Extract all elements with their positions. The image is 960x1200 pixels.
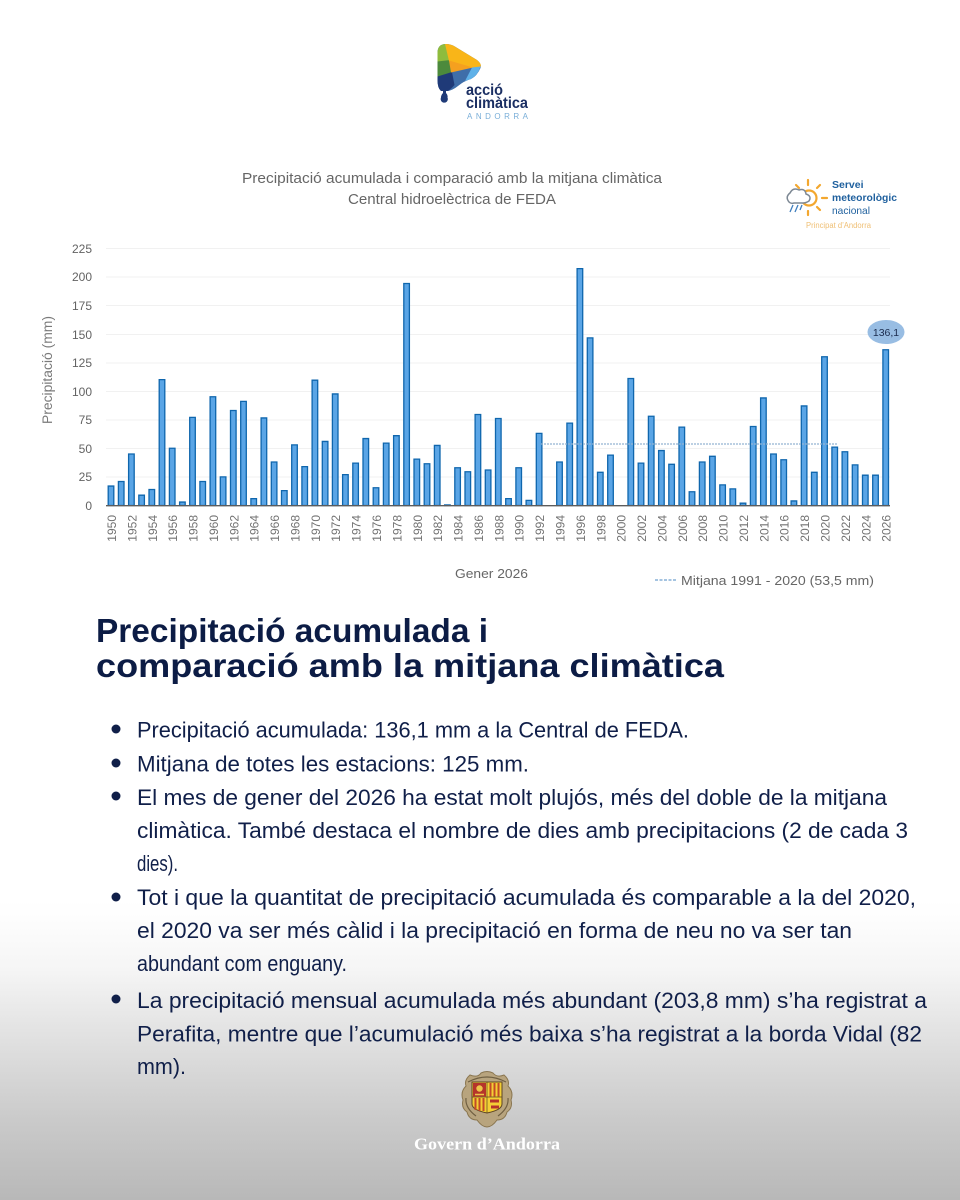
x axis year labels: 2026 (880, 515, 894, 542)
x axis year labels: 1970 (309, 515, 323, 542)
heading (96, 612, 725, 684)
y axis labels (72, 242, 92, 513)
x axis year labels: 1980 (411, 515, 425, 542)
bullet: rainy January: El mes de gener del 2026 ha estat molt plujós, més del doble de la mitjana (137, 785, 887, 810)
y axis labels: 175 (72, 299, 92, 313)
logo: Servei meteorològic nacional: meteorològic (832, 192, 897, 204)
y axis labels: 50 (79, 442, 92, 456)
x axis year labels: 1990 (513, 515, 527, 542)
logo: Servei meteorològic nacional: Principat d’Andorra (806, 221, 872, 230)
x axis year labels: 1962 (227, 515, 241, 542)
x axis year labels: 1978 (390, 515, 404, 542)
bullet: rainy January: dies). (137, 851, 178, 876)
bullet: comparison with 2020: Tot i que la quantitat de precipitació acumulada és comparable a la del 2020, (137, 885, 916, 910)
x axis year labels: 1986 (472, 515, 486, 542)
x axis year labels: 2000 (615, 515, 629, 542)
y axis labels: 25 (79, 470, 92, 484)
x axis year labels: 1966 (268, 515, 282, 542)
x axis year labels: 1988 (492, 515, 506, 542)
chart title (242, 171, 663, 208)
x axis year labels: 1950 (105, 515, 119, 542)
y axis labels: 125 (72, 356, 92, 370)
heading: comparació amb la mitjana climàtica (96, 647, 725, 684)
x axis year labels: 1996 (574, 515, 588, 542)
logo: Servei meteorològic nacional: nacional (832, 205, 870, 217)
Govern d'Andorra wordmark: Govern d’Andorra (414, 1134, 561, 1154)
x axis year labels: 1958 (186, 515, 200, 542)
x axis year labels: 1982 (431, 515, 445, 542)
x axis year labels: 1952 (125, 515, 139, 542)
x axis year labels: 2006 (676, 515, 690, 542)
bullet list (112, 718, 927, 1079)
y axis title: Precipitació (mm) (40, 316, 55, 424)
x axis year labels: 1968 (288, 515, 302, 542)
y axis labels: 75 (79, 413, 92, 427)
callout: 2026 value (868, 320, 904, 344)
legend: Mitjana 1991 - 2020 (53,5 mm) (681, 573, 874, 588)
x axis year labels: 1956 (166, 515, 180, 542)
y axis labels: 225 (72, 242, 92, 256)
x axis year labels: 2018 (798, 515, 812, 542)
x axis year labels: 1998 (594, 515, 608, 542)
bullet: comparison with 2020: abundant com enguany. (137, 951, 347, 976)
callout: 2026 value: 136,1 (873, 327, 899, 339)
x axis year labels: 1960 (207, 515, 221, 542)
x axis year labels: 2002 (635, 515, 649, 542)
x axis year labels: 2016 (778, 515, 792, 542)
bullet: highest and lowest totals: Perafita, mentre que l’acumulació més baixa s’ha registrat a la borda Vidal (82 (137, 1022, 922, 1046)
bullet: comparison with 2020 (112, 885, 916, 976)
logo: Servei meteorològic nacional (787, 179, 897, 230)
x axis year labels: 2004 (655, 515, 669, 542)
x axis year labels: 1964 (248, 515, 262, 542)
x axis year labels: 2022 (839, 515, 853, 542)
x axis year labels: 1984 (452, 515, 466, 542)
bar chart: precipitation 1950-2026 (40, 242, 904, 588)
logo: Acció Climàtica Andorra (438, 44, 529, 121)
bars (108, 269, 888, 506)
x axis line (106, 505, 890, 507)
x axis year labels: 2020 (818, 515, 832, 542)
x axis year labels: 1994 (554, 515, 568, 542)
chart title: Central hidroelèctrica de FEDA (348, 192, 556, 208)
y axis labels: 0 (85, 499, 92, 513)
climate mean line (541, 443, 838, 445)
x axis year labels: 1974 (350, 515, 364, 542)
bullet: highest and lowest totals (112, 988, 927, 1079)
x axis year labels: 2024 (859, 515, 873, 542)
logo: Acció Climàtica Andorra: climàtica (466, 95, 528, 112)
x axis year labels: 2014 (757, 515, 771, 542)
bullet: accumulated precipitation: Precipitació acumulada: 136,1 mm a la Central de FEDA. (137, 718, 689, 742)
x axis year labels: 1976 (370, 515, 384, 542)
x axis year labels: 1972 (329, 515, 343, 542)
x axis year labels: 1954 (146, 515, 160, 542)
bullet: highest and lowest totals: La precipitació mensual acumulada més abundant (203,8 mm) s’ha registrat a (137, 988, 927, 1013)
bullet: mean of all stations: Mitjana de totes les estacions: 125 mm. (137, 752, 529, 776)
chart title: Precipitació acumulada i comparació amb la mitjana climàtica (242, 171, 663, 187)
y axis labels: 100 (72, 385, 92, 399)
x axis year labels: 1992 (533, 515, 547, 542)
heading: Precipitació acumulada i (96, 612, 488, 649)
y axis labels: 150 (72, 328, 92, 342)
logo: Servei meteorològic nacional: Servei (832, 179, 864, 191)
bullet: highest and lowest totals: mm). (137, 1054, 186, 1079)
x axis title: Gener 2026 (455, 566, 528, 581)
x axis year labels: 2012 (737, 515, 751, 542)
bullet: comparison with 2020: el 2020 va ser més càlid i la precipitació en forma de neu no va ser tan (137, 918, 852, 943)
bullet: rainy January: climàtica. També destaca el nombre de dies amb precipitacions (2 de cada 3 (137, 818, 908, 843)
bullet: rainy January (112, 785, 908, 876)
x axis year labels: 2008 (696, 515, 710, 542)
y axis labels: 200 (72, 270, 92, 284)
logo: Acció Climàtica Andorra: acció (466, 82, 503, 99)
x axis year labels: 2010 (717, 515, 731, 542)
icon: coat of arms of Andorra (462, 1072, 512, 1127)
x axis year labels (105, 515, 894, 542)
logo: Acció Climàtica Andorra: ANDORRA (467, 112, 529, 121)
